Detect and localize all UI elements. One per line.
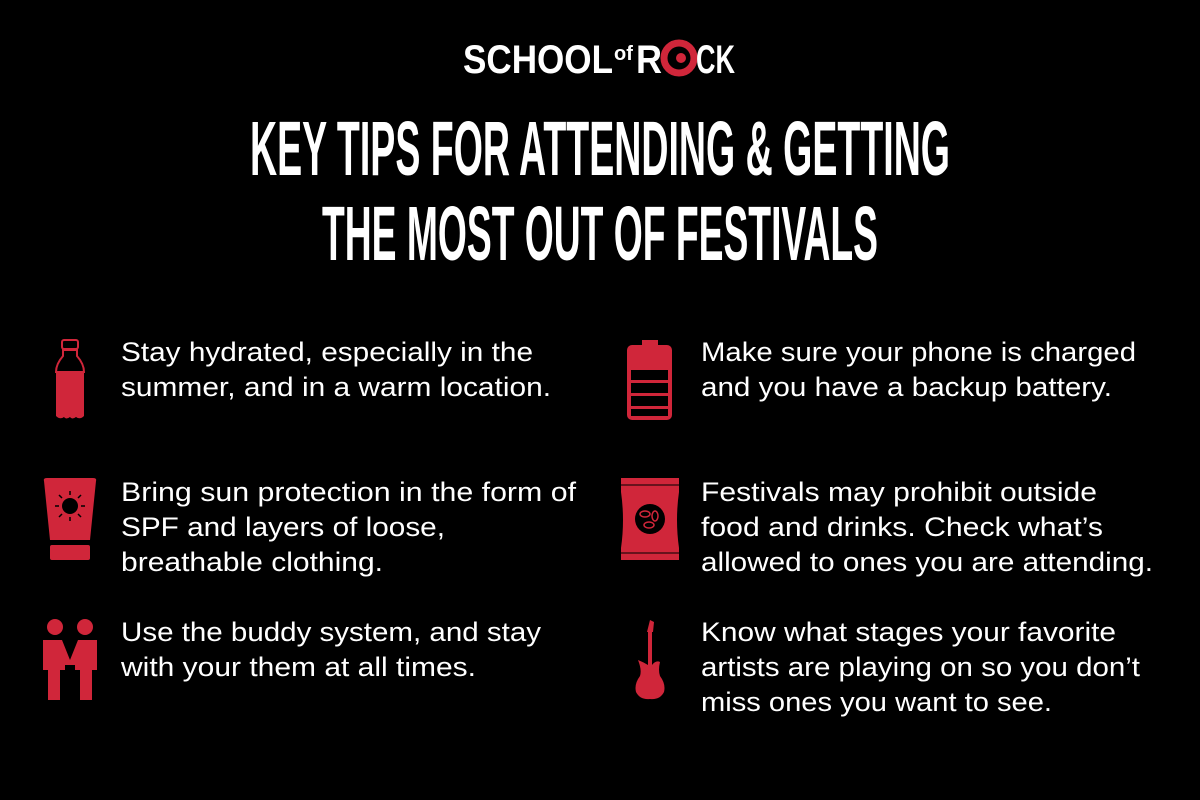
text: stages: artists are playing on so you don’t	[701, 652, 1141, 682]
text: sun protection: SPF and layers of loose,	[121, 512, 445, 542]
text: sun protection: breathable clothing.	[121, 547, 383, 577]
text: food: allowed to ones you are attending.	[701, 547, 1153, 577]
icon: buddies	[43, 619, 97, 700]
text: hydration: Stay hydrated, especially in the	[121, 337, 533, 367]
icon: battery	[627, 340, 672, 420]
title	[250, 106, 950, 277]
text: buddy system: with your them at all times.	[120, 652, 476, 682]
logo: CK	[696, 38, 735, 82]
text: phone: Make sure your phone is charged	[701, 337, 1136, 367]
text: hydration	[121, 337, 551, 402]
text: food	[701, 477, 1153, 577]
logo: R	[636, 38, 662, 82]
text: sun protection: Bring sun protection in the form of	[121, 477, 577, 507]
text: sun protection	[121, 477, 577, 577]
logo: SCHOOL	[463, 38, 613, 82]
logo: of	[614, 43, 633, 65]
text: buddy system	[120, 617, 542, 682]
icon: sunscreen	[44, 478, 96, 560]
text: stages	[701, 617, 1141, 717]
logo	[463, 38, 735, 82]
text: phone	[701, 337, 1136, 402]
text: food: Festivals may prohibit outside	[701, 477, 1097, 507]
icon: guitar	[636, 620, 664, 699]
icon: water bottle	[56, 340, 84, 418]
text: phone: and you have a backup battery.	[701, 372, 1112, 402]
text: stages: Know what stages your favorite	[701, 617, 1116, 647]
icon: snack bag	[621, 478, 679, 560]
text: stages: miss ones you want to see.	[701, 687, 1052, 717]
text: hydration: summer, and in a warm location.	[121, 372, 551, 402]
text: buddy system: Use the buddy system, and stay	[121, 617, 542, 647]
text: food: food and drinks. Check what’s	[701, 512, 1103, 542]
